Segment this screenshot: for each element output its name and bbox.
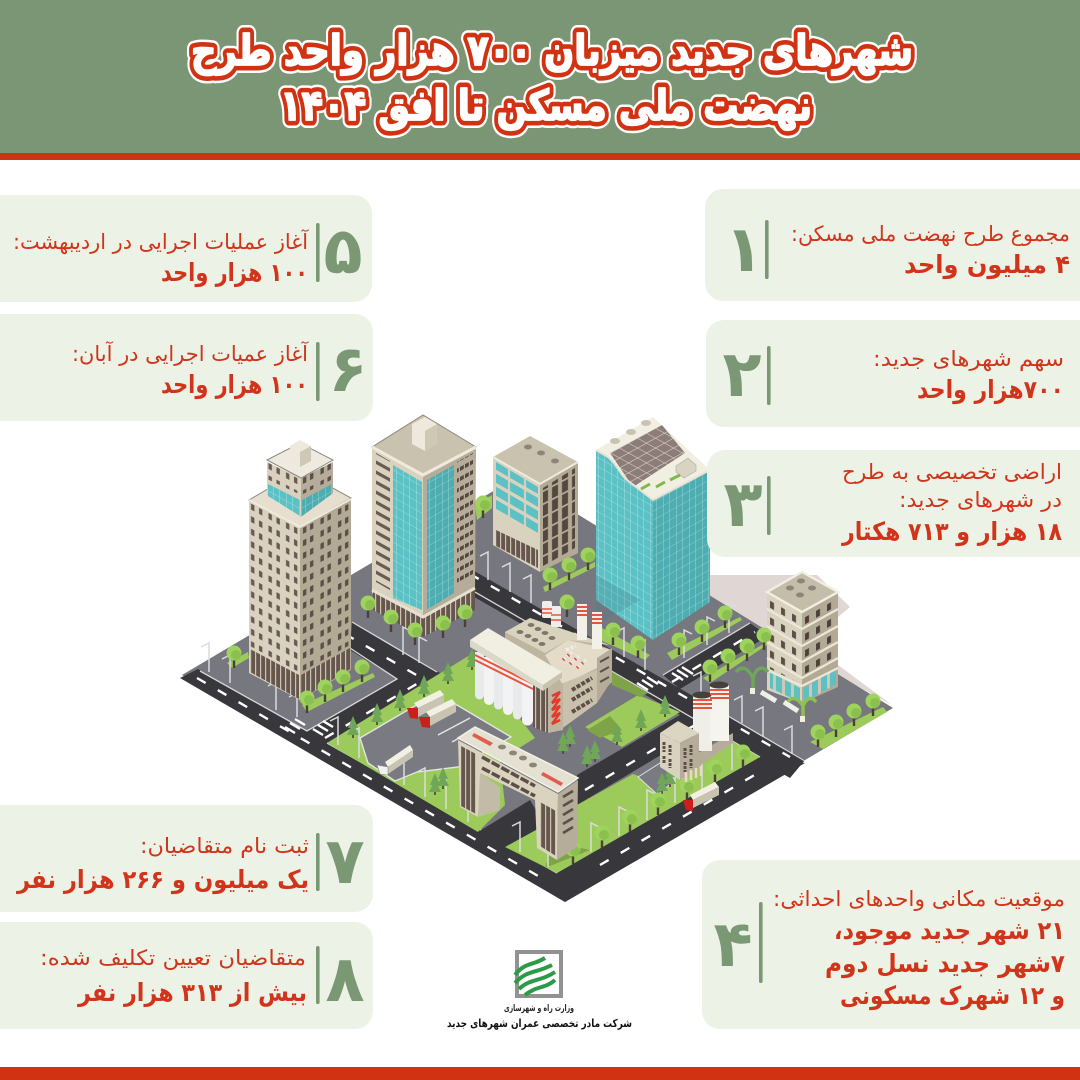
card 1: ۱ — [724, 213, 764, 287]
building: glass tower — [596, 417, 710, 640]
header band — [0, 0, 1080, 153]
logo ministry text: وزارت راه و شهرسازی — [504, 1004, 574, 1014]
header red rule — [0, 153, 1080, 160]
lamp posts — [201, 552, 792, 867]
building: six storey block — [767, 572, 838, 703]
card 6: آغاز عمیات اجرایی در آبان: — [72, 341, 309, 366]
title: نهضت ملی مسکن تا افق ۱۴۰۴ — [280, 81, 812, 131]
parking lot — [360, 700, 511, 781]
road markings — [197, 574, 805, 880]
card 1: ۴ میلیون واحد — [904, 250, 1070, 280]
benches and potted palms — [736, 668, 816, 722]
parking lines — [438, 718, 472, 742]
card 4 — [702, 860, 1080, 1029]
round trees — [226, 496, 880, 864]
card 1 — [705, 189, 1080, 301]
logo mark — [515, 952, 561, 996]
card 7: ثبت نام متقاضیان: — [140, 834, 309, 858]
title — [191, 26, 913, 131]
logo — [447, 952, 632, 1030]
card 8: بیش از ۳۱۳ هزار نفر — [76, 978, 307, 1008]
building: left podium tower — [249, 440, 351, 700]
gate building — [458, 727, 578, 860]
card 4: ۷شهر جدید نسل دوم — [825, 949, 1065, 979]
card 8: ۸ — [325, 943, 365, 1017]
card 4: ۲۱ شهر جدید موجود، — [834, 916, 1065, 946]
card 7: یک میلیون و ۲۶۶ هزار نفر — [15, 865, 309, 895]
card 5: ۱۰۰ هزار واحد — [161, 258, 308, 288]
card 5 — [0, 195, 372, 302]
card 7 — [0, 805, 373, 912]
card 2 — [706, 320, 1080, 427]
green plot shading — [545, 672, 648, 868]
card 2: ۲ — [722, 338, 762, 412]
perimeter road — [180, 669, 805, 902]
card 3: ۳ — [723, 468, 763, 542]
card 6: ۱۰۰ هزار واحد — [161, 370, 308, 400]
title: نهضت ملی مسکن تا افق ۱۴۰۴ — [280, 81, 812, 131]
title: شهرهای جدید میزبان ۷۰۰ هزار واحد طرح — [191, 26, 913, 76]
building: mid-rise — [493, 436, 578, 572]
card 4: و ۱۲ شهرک مسکونی — [840, 981, 1065, 1011]
title: شهرهای جدید میزبان ۷۰۰ هزار واحد طرح — [191, 26, 913, 76]
inner roads — [295, 560, 805, 805]
under-gate road — [478, 800, 545, 847]
ground plate — [182, 477, 893, 902]
title: نهضت ملی مسکن تا افق ۱۴۰۴ — [280, 81, 812, 131]
card 4: ۴ — [713, 908, 753, 982]
factory — [470, 601, 612, 733]
pine trees — [347, 648, 676, 795]
card 1: مجموع طرح نهضت ملی مسکن: — [791, 222, 1070, 246]
card 3: در شهرهای جدید: — [899, 488, 1062, 512]
card 3: اراضی تخصیصی به طرح — [842, 460, 1062, 484]
green plots — [227, 495, 887, 873]
card 8 — [0, 922, 373, 1029]
logo company text: شرکت مادر تخصصی عمران شهرهای جدید — [447, 1017, 632, 1030]
power plant — [660, 682, 733, 782]
trucks — [377, 690, 719, 811]
card 7: ۷ — [325, 825, 365, 899]
ground shadow — [577, 530, 892, 705]
building: tall teal tower — [372, 415, 476, 637]
isometric city illustration — [180, 415, 893, 902]
card 6 — [0, 314, 373, 421]
card 2: ۷۰۰هزار واحد — [917, 375, 1064, 405]
card 5: آغاز عملیات اجرایی در اردیبهشت: — [13, 229, 309, 254]
card 5: ۵ — [323, 215, 363, 289]
card 3: ۱۸ هزار و ۷۱۳ هکتار — [840, 517, 1062, 547]
plant lot — [638, 763, 675, 795]
title: شهرهای جدید میزبان ۷۰۰ هزار واحد طرح — [191, 26, 913, 76]
card 2: سهم شهرهای جدید: — [873, 347, 1064, 372]
card 4: موقعیت مکانی واحدهای احداثی: — [773, 887, 1065, 911]
card 6: ۶ — [328, 333, 368, 407]
bottom red bar — [0, 1067, 1080, 1080]
card 8: متقاضیان تعیین تکلیف شده: — [40, 946, 306, 970]
card 3 — [707, 450, 1080, 557]
